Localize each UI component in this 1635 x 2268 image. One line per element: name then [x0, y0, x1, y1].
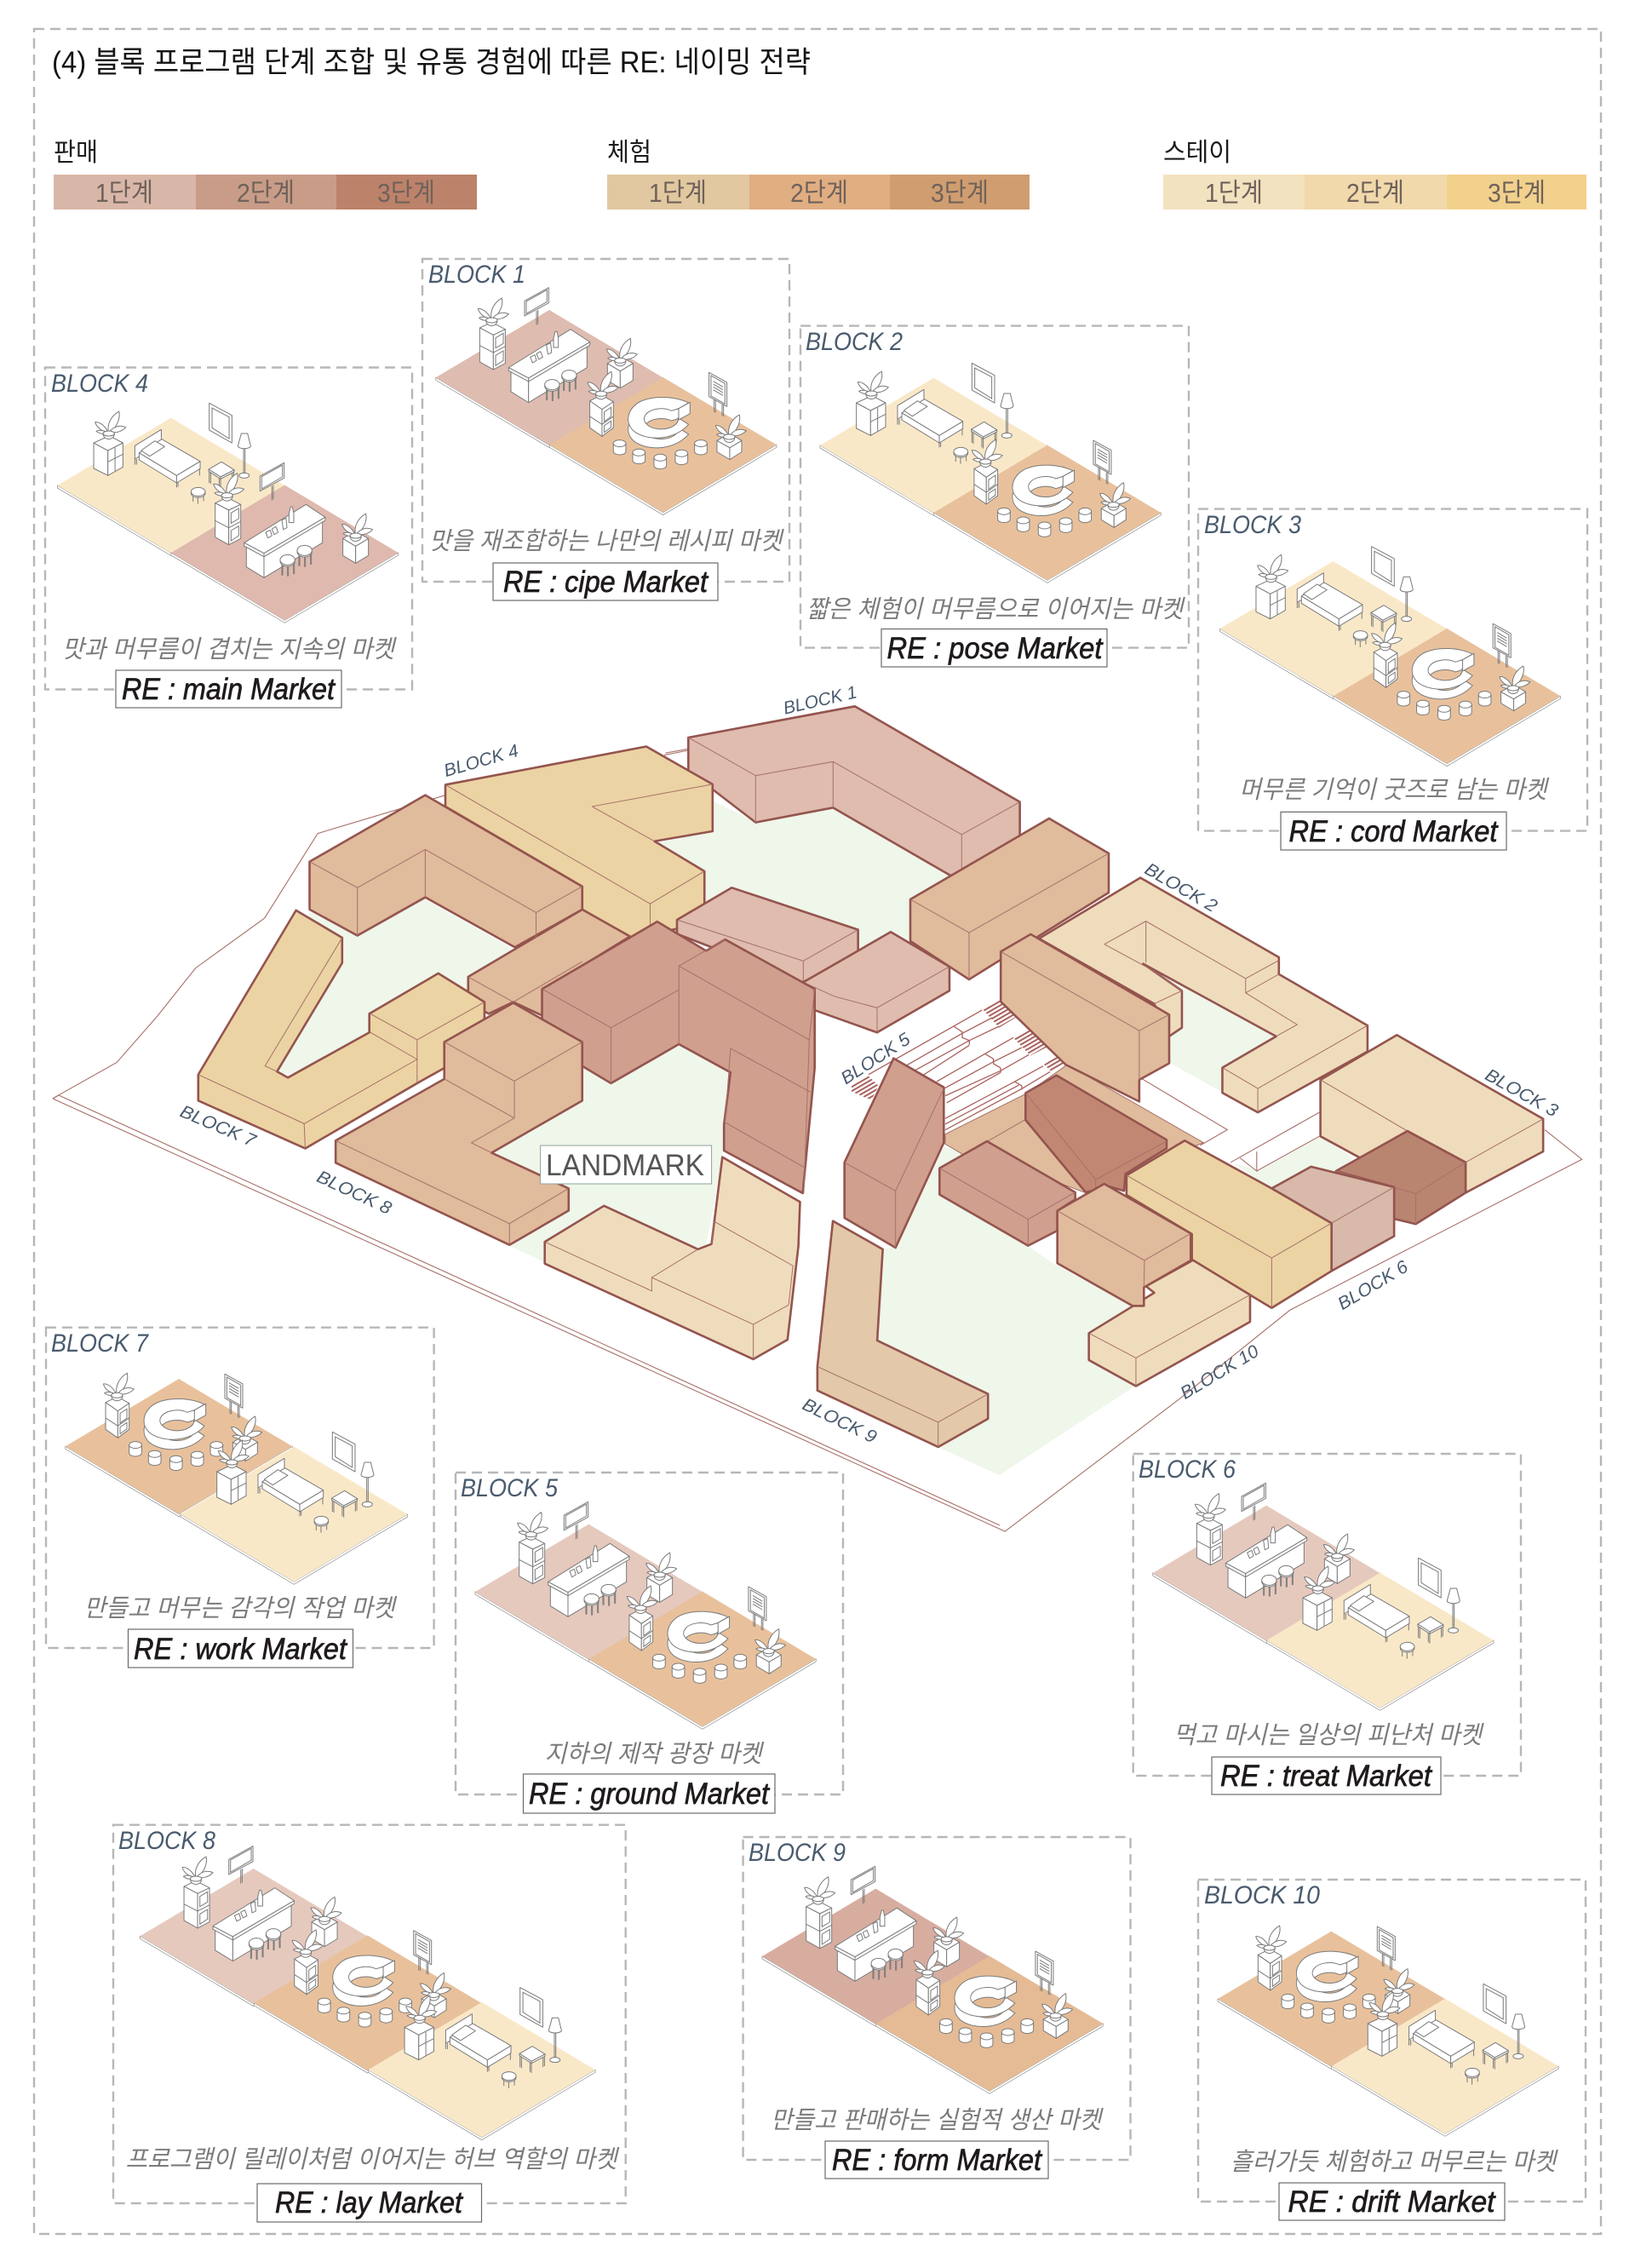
landmark label: LANDMARK	[546, 1149, 704, 1182]
building: central pink wings	[677, 887, 949, 1032]
panel: BLOCK 3: BLOCK 3	[1204, 511, 1301, 539]
building: landmark	[542, 922, 815, 1193]
legend: 체험: 2단계	[790, 178, 848, 208]
map labels: BLOCK 9	[799, 1395, 880, 1448]
site plan: buildings	[198, 706, 1543, 1447]
panel: BLOCK 4: BLOCK 4	[51, 370, 148, 398]
panel: BLOCK 2	[800, 326, 1189, 667]
panel: BLOCK 3: 머무른 기억이 굿즈로 남는 마켓	[1240, 777, 1550, 804]
map labels: BLOCK 1	[782, 682, 859, 719]
panel: BLOCK 1: BLOCK 1	[428, 261, 525, 289]
panel: BLOCK 9	[743, 1837, 1131, 2179]
legend: 스테이: 1단계	[1205, 178, 1263, 208]
legend: 판매: 판매	[54, 139, 98, 167]
building: north-east experience block	[910, 818, 1109, 979]
legend: 판매	[54, 139, 477, 210]
panel: BLOCK 7	[46, 1328, 434, 1668]
map labels: BLOCK 4	[442, 741, 521, 781]
building: BLOCK 5 front slab	[939, 1141, 1076, 1246]
building: BLOCK 3	[1321, 1035, 1543, 1224]
map labels	[177, 682, 1562, 1448]
panel: BLOCK 2: 짧은 체험이 머무름으로 이어지는 마켓	[806, 596, 1185, 623]
map labels: BLOCK 5	[837, 1030, 914, 1088]
panel: BLOCK 5: RE : ground Market	[529, 1777, 770, 1811]
map labels: BLOCK 3	[1482, 1065, 1562, 1121]
panel: BLOCK 1	[422, 259, 789, 600]
panel: BLOCK 8: BLOCK 8	[118, 1827, 215, 1855]
building: BLOCK 8	[336, 1003, 582, 1245]
building: BLOCK 5 dark core	[1025, 1076, 1167, 1192]
legend: 체험	[607, 139, 1030, 210]
panel: BLOCK 7: RE : work Market	[134, 1633, 347, 1666]
building: central podium	[945, 1065, 1203, 1192]
panel: BLOCK 8	[113, 1825, 626, 2222]
panel: BLOCK 9: 만들고 판매하는 실험적 생산 마켓	[771, 2107, 1104, 2134]
building: south block	[545, 1157, 800, 1359]
panel: BLOCK 5	[456, 1473, 843, 1813]
panel: BLOCK 1: RE : cipe Market	[503, 566, 708, 599]
map labels: BLOCK 2	[1141, 859, 1220, 916]
panel: BLOCK 3: RE : cord Market	[1289, 815, 1499, 848]
building: BLOCK 10	[1089, 1260, 1250, 1387]
legend: 체험: 체험	[607, 139, 651, 167]
title: (4) 블록 프로그램 단계 조합 및 유통 경험에 따른 RE: 네이밍 전략	[52, 46, 811, 79]
building: BLOCK 4 upper	[445, 747, 713, 938]
building: BLOCK 5 east slab	[845, 1059, 944, 1248]
building: BLOCK 2	[1039, 878, 1368, 1112]
panel: BLOCK 6: RE : treat Market	[1220, 1760, 1432, 1793]
panel: BLOCK 5: 지하의 제작 광장 마켓	[545, 1741, 765, 1768]
legend: 스테이: 스테이	[1163, 139, 1231, 167]
panel: BLOCK 7: 만들고 머무는 감각의 작업 마켓	[83, 1595, 398, 1622]
building: BLOCK 6	[1127, 1140, 1394, 1308]
panel: BLOCK 8: 프로그램이 릴레이처럼 이어지는 허브 역할의 마켓	[126, 2146, 620, 2173]
building: BLOCK 10 experience volume	[1058, 1184, 1190, 1306]
building: BLOCK 1	[688, 706, 1020, 876]
legend: 체험: 1단계	[649, 178, 707, 208]
panel: BLOCK 5: BLOCK 5	[461, 1474, 558, 1502]
map labels: BLOCK 8	[313, 1167, 395, 1219]
building: BLOCK 5 tower	[1001, 934, 1169, 1101]
panel: BLOCK 2: BLOCK 2	[806, 328, 903, 356]
panel: BLOCK 9: RE : form Market	[832, 2144, 1042, 2177]
panel: BLOCK 4: 맛과 머무름이 겹치는 지속의 마켓	[62, 636, 397, 663]
panel: BLOCK 3	[1198, 509, 1587, 850]
legend: 판매: 3단계	[377, 178, 435, 208]
map labels: BLOCK 10	[1177, 1341, 1263, 1404]
panel: BLOCK 6: 먹고 마시는 일상의 피난처 마켓	[1173, 1722, 1484, 1749]
map labels: BLOCK 6	[1334, 1257, 1412, 1314]
panel: BLOCK 2: RE : pose Market	[887, 632, 1104, 665]
panel: BLOCK 10	[1198, 1880, 1586, 2220]
legend: 체험: 3단계	[931, 178, 989, 208]
legend: 스테이	[1163, 139, 1586, 210]
building: BLOCK 4 west wing	[310, 795, 630, 1016]
panel: BLOCK 4	[45, 368, 412, 708]
panel: BLOCK 6	[1133, 1454, 1521, 1794]
panel: BLOCK 7: BLOCK 7	[51, 1329, 149, 1358]
site plan: ground and roads	[53, 749, 1582, 1531]
panel: BLOCK 1: 맛을 재조합하는 나만의 레시피 마켓	[429, 528, 784, 555]
panel: BLOCK 9: BLOCK 9	[749, 1839, 846, 1867]
map labels: BLOCK 7	[177, 1102, 260, 1151]
panel: BLOCK 10: BLOCK 10	[1204, 1881, 1320, 1909]
panel: BLOCK 6: BLOCK 6	[1139, 1456, 1236, 1484]
legend: 판매: 2단계	[237, 178, 295, 208]
stepped plaza of BLOCK 5	[852, 999, 1069, 1130]
legend: 스테이: 3단계	[1488, 178, 1546, 208]
panel: BLOCK 8: RE : lay Market	[275, 2186, 463, 2219]
building: BLOCK 7	[198, 910, 485, 1148]
legend: 판매: 1단계	[95, 178, 153, 208]
legend: 스테이: 2단계	[1346, 178, 1404, 208]
building: BLOCK 9	[818, 1221, 988, 1447]
panel: BLOCK 10: 흘러가듯 체험하고 머무르는 마켓	[1231, 2149, 1558, 2176]
panel: BLOCK 10: RE : drift Market	[1288, 2185, 1496, 2219]
panel: BLOCK 4: RE : main Market	[122, 673, 336, 706]
